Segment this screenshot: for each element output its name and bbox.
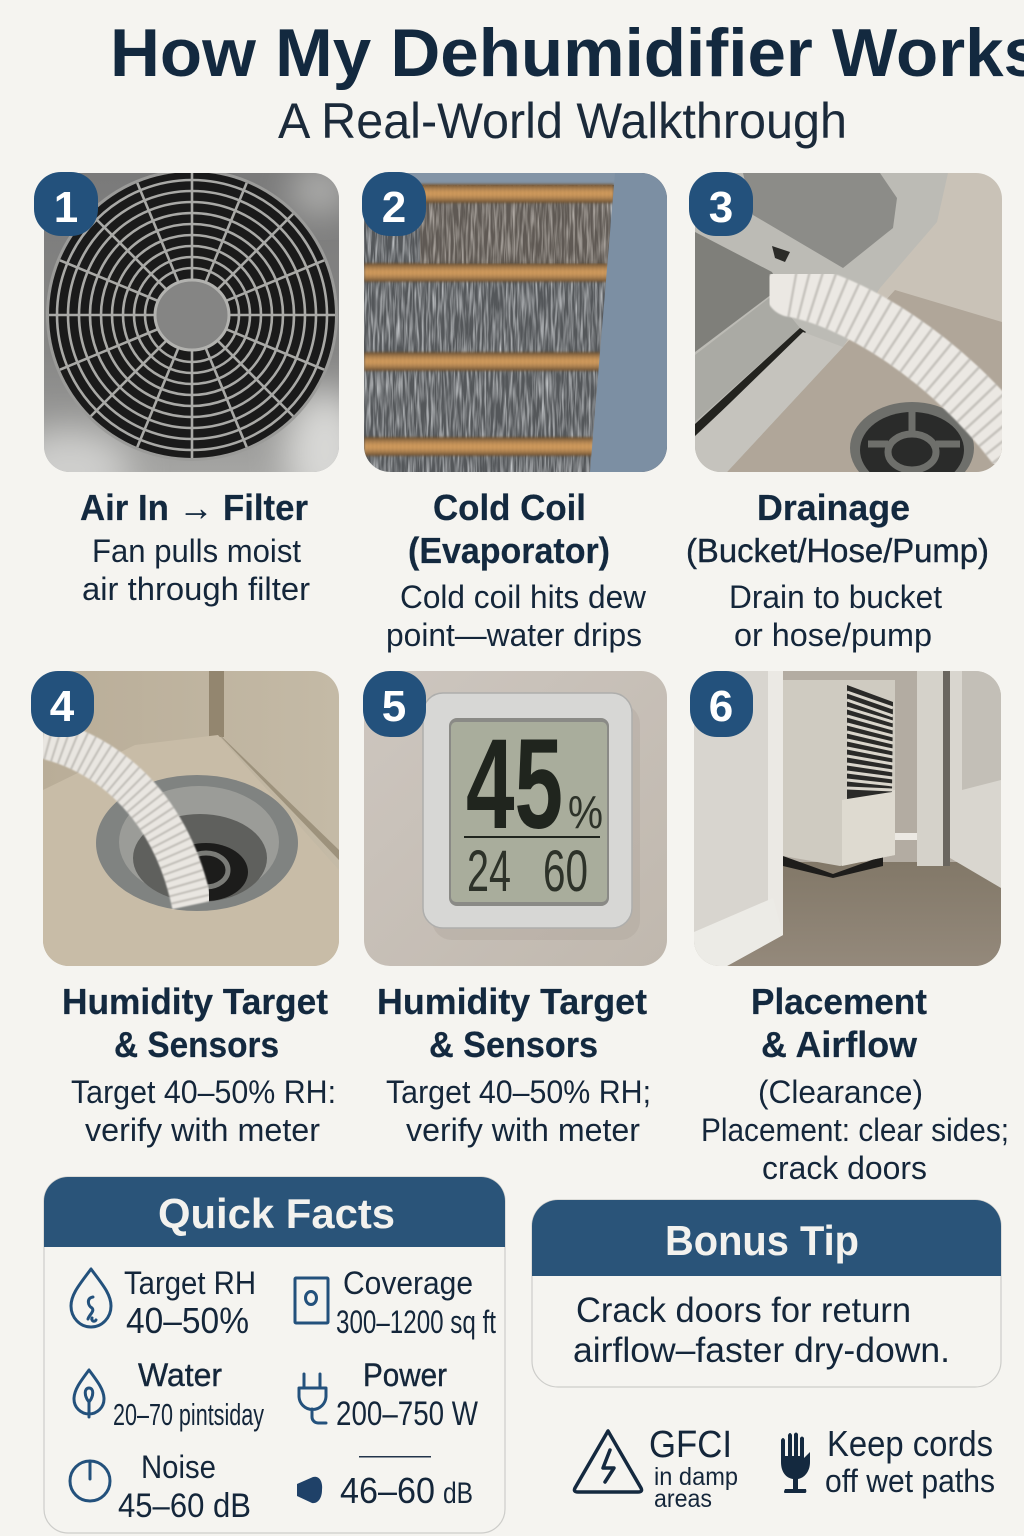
safety note: GFCI	[574, 1424, 738, 1513]
fact: coverage: 300–1200 sq ft	[336, 1304, 496, 1340]
caption: step 5: Humidity Target	[377, 981, 647, 1022]
caption: step 6: (Clearance)	[758, 1074, 923, 1110]
caption: step 3: or hose/pump	[734, 617, 932, 653]
caption: step 1	[80, 487, 310, 607]
illustration: fan grille	[44, 173, 339, 472]
fact: target RH: Target RH	[124, 1265, 256, 1301]
quick facts header	[44, 1177, 505, 1247]
fact: target RH	[71, 1265, 256, 1341]
icon: speaker	[297, 1477, 322, 1503]
safety note: GFCI: areas	[654, 1485, 712, 1513]
quick facts header: Quick Facts	[158, 1190, 395, 1237]
bonus tip text: airflow–faster dry-down.	[573, 1331, 950, 1370]
fact: coverage: Coverage	[343, 1265, 473, 1301]
caption: step 3: (Bucket/Hose/Pump)	[686, 532, 989, 569]
illustration: dehumidifier behind doorway	[694, 671, 1001, 966]
caption: step 2: point—water drips	[386, 617, 642, 653]
panel: step 2 cold coil	[362, 172, 667, 472]
caption: step 6: & Airflow	[761, 1024, 918, 1065]
fact: coverage	[295, 1265, 496, 1340]
fact: sound level: dB	[443, 1477, 473, 1510]
fact: water: 20–70 pintsiday	[113, 1397, 264, 1432]
caption: step 1: Fan pulls moist	[92, 533, 301, 569]
caption: step 3: Drain to bucket	[729, 579, 942, 615]
fact: sound level	[297, 1456, 473, 1511]
safety note: keep cords off wet paths: off wet paths	[825, 1463, 995, 1499]
panel: step 6 placement	[690, 671, 1001, 966]
readout: 45 percent	[467, 740, 602, 829]
caption: step 6	[701, 981, 1009, 1186]
readout: temperature and humidity: 24	[467, 839, 511, 904]
fact: power	[299, 1357, 478, 1433]
fact: sound level: 46–60	[340, 1470, 435, 1511]
panel: step 5 humidity meter	[363, 671, 667, 966]
caption: step 6: Placement: clear sides;	[701, 1112, 1009, 1148]
panel: bonus tip	[532, 1200, 1001, 1387]
badge 5: 5	[382, 682, 406, 731]
badge 1	[34, 172, 98, 236]
caption: step 1: Air In → Filter	[80, 487, 308, 528]
icon: water drop	[71, 1269, 111, 1327]
subtitle: A Real-World Walkthrough	[278, 93, 847, 149]
illustration: hose in floor drain	[25, 671, 339, 966]
badge 2: 2	[382, 183, 406, 232]
icon: plug	[299, 1374, 326, 1423]
bonus tip header	[532, 1200, 1001, 1276]
badge 4	[31, 671, 94, 737]
caption: step 1: air through filter	[82, 571, 310, 607]
caption: step 5: & Sensors	[429, 1024, 598, 1065]
safety note: GFCI: GFCI	[649, 1424, 732, 1466]
badge 6: 6	[709, 682, 733, 731]
caption: step 5: Target 40–50% RH;	[386, 1074, 651, 1110]
caption: step 3: Drainage	[757, 487, 910, 528]
caption: step 5: verify with meter	[406, 1112, 640, 1148]
badge 2	[362, 172, 426, 236]
icon: power circle	[70, 1461, 110, 1501]
panel: quick facts	[44, 1177, 505, 1533]
caption: step 4: Target 40–50% RH:	[71, 1074, 336, 1110]
readout: 45 percent: 45	[466, 713, 563, 856]
illustration: copper coil and fins	[364, 173, 667, 472]
caption: step 5	[377, 981, 651, 1148]
badge 4: 4	[50, 682, 75, 731]
fact: water	[74, 1357, 264, 1432]
fact: power: 200–750 W	[336, 1395, 478, 1433]
bonus tip header: Bonus Tip	[665, 1217, 859, 1264]
badge 3: 3	[709, 183, 733, 232]
caption: step 4	[62, 981, 336, 1148]
fact: noise: Noise	[141, 1449, 216, 1485]
panel: step 4 humidity target, hose in drain	[25, 671, 339, 966]
caption: step 4: verify with meter	[85, 1112, 320, 1148]
safety note: GFCI: in damp	[654, 1463, 738, 1491]
badge 3	[689, 172, 753, 236]
panel: step 3 drainage	[689, 172, 1002, 472]
icon: leaf drop	[74, 1370, 104, 1417]
fact: noise: 45–60 dB	[118, 1487, 251, 1525]
badge 1: 1	[54, 183, 78, 232]
fact: power: Power	[363, 1357, 447, 1393]
fact: water: Water	[138, 1357, 222, 1393]
caption: step 4: & Sensors	[114, 1024, 279, 1065]
readout: temperature and humidity: 60	[543, 839, 588, 904]
caption: step 2: Cold Coil	[433, 487, 586, 528]
caption: step 2: (Evaporator)	[408, 530, 610, 571]
fact: target RH: 40–50%	[126, 1300, 249, 1341]
caption: step 6: crack doors	[762, 1150, 927, 1186]
title: How My Dehumidifier Works	[110, 15, 1024, 91]
readout: 45 percent: %	[568, 786, 603, 838]
caption: step 3	[686, 487, 989, 653]
caption: step 2	[386, 487, 647, 653]
illustration: digital hygrometer	[364, 671, 667, 966]
safety note: keep cords off wet paths: Keep cords	[827, 1423, 993, 1464]
caption: step 4: Humidity Target	[62, 981, 328, 1022]
icon: electrical warning triangle	[574, 1431, 642, 1492]
badge 5	[363, 671, 426, 737]
badge 6	[690, 671, 753, 737]
icon: hand glass	[781, 1432, 810, 1493]
caption: step 6: Placement	[751, 981, 927, 1022]
safety note: keep cords off wet paths	[781, 1423, 995, 1499]
readout: temperature and humidity	[469, 850, 586, 892]
bonus tip text	[573, 1291, 950, 1370]
panel: step 1 air in and filter	[34, 172, 339, 472]
fact: noise	[70, 1449, 251, 1525]
illustration: hose leaving unit	[695, 173, 1002, 472]
icon: room outlet	[295, 1278, 328, 1323]
bonus tip text: Crack doors for return	[576, 1291, 911, 1330]
caption: step 2: Cold coil hits dew	[400, 579, 647, 615]
